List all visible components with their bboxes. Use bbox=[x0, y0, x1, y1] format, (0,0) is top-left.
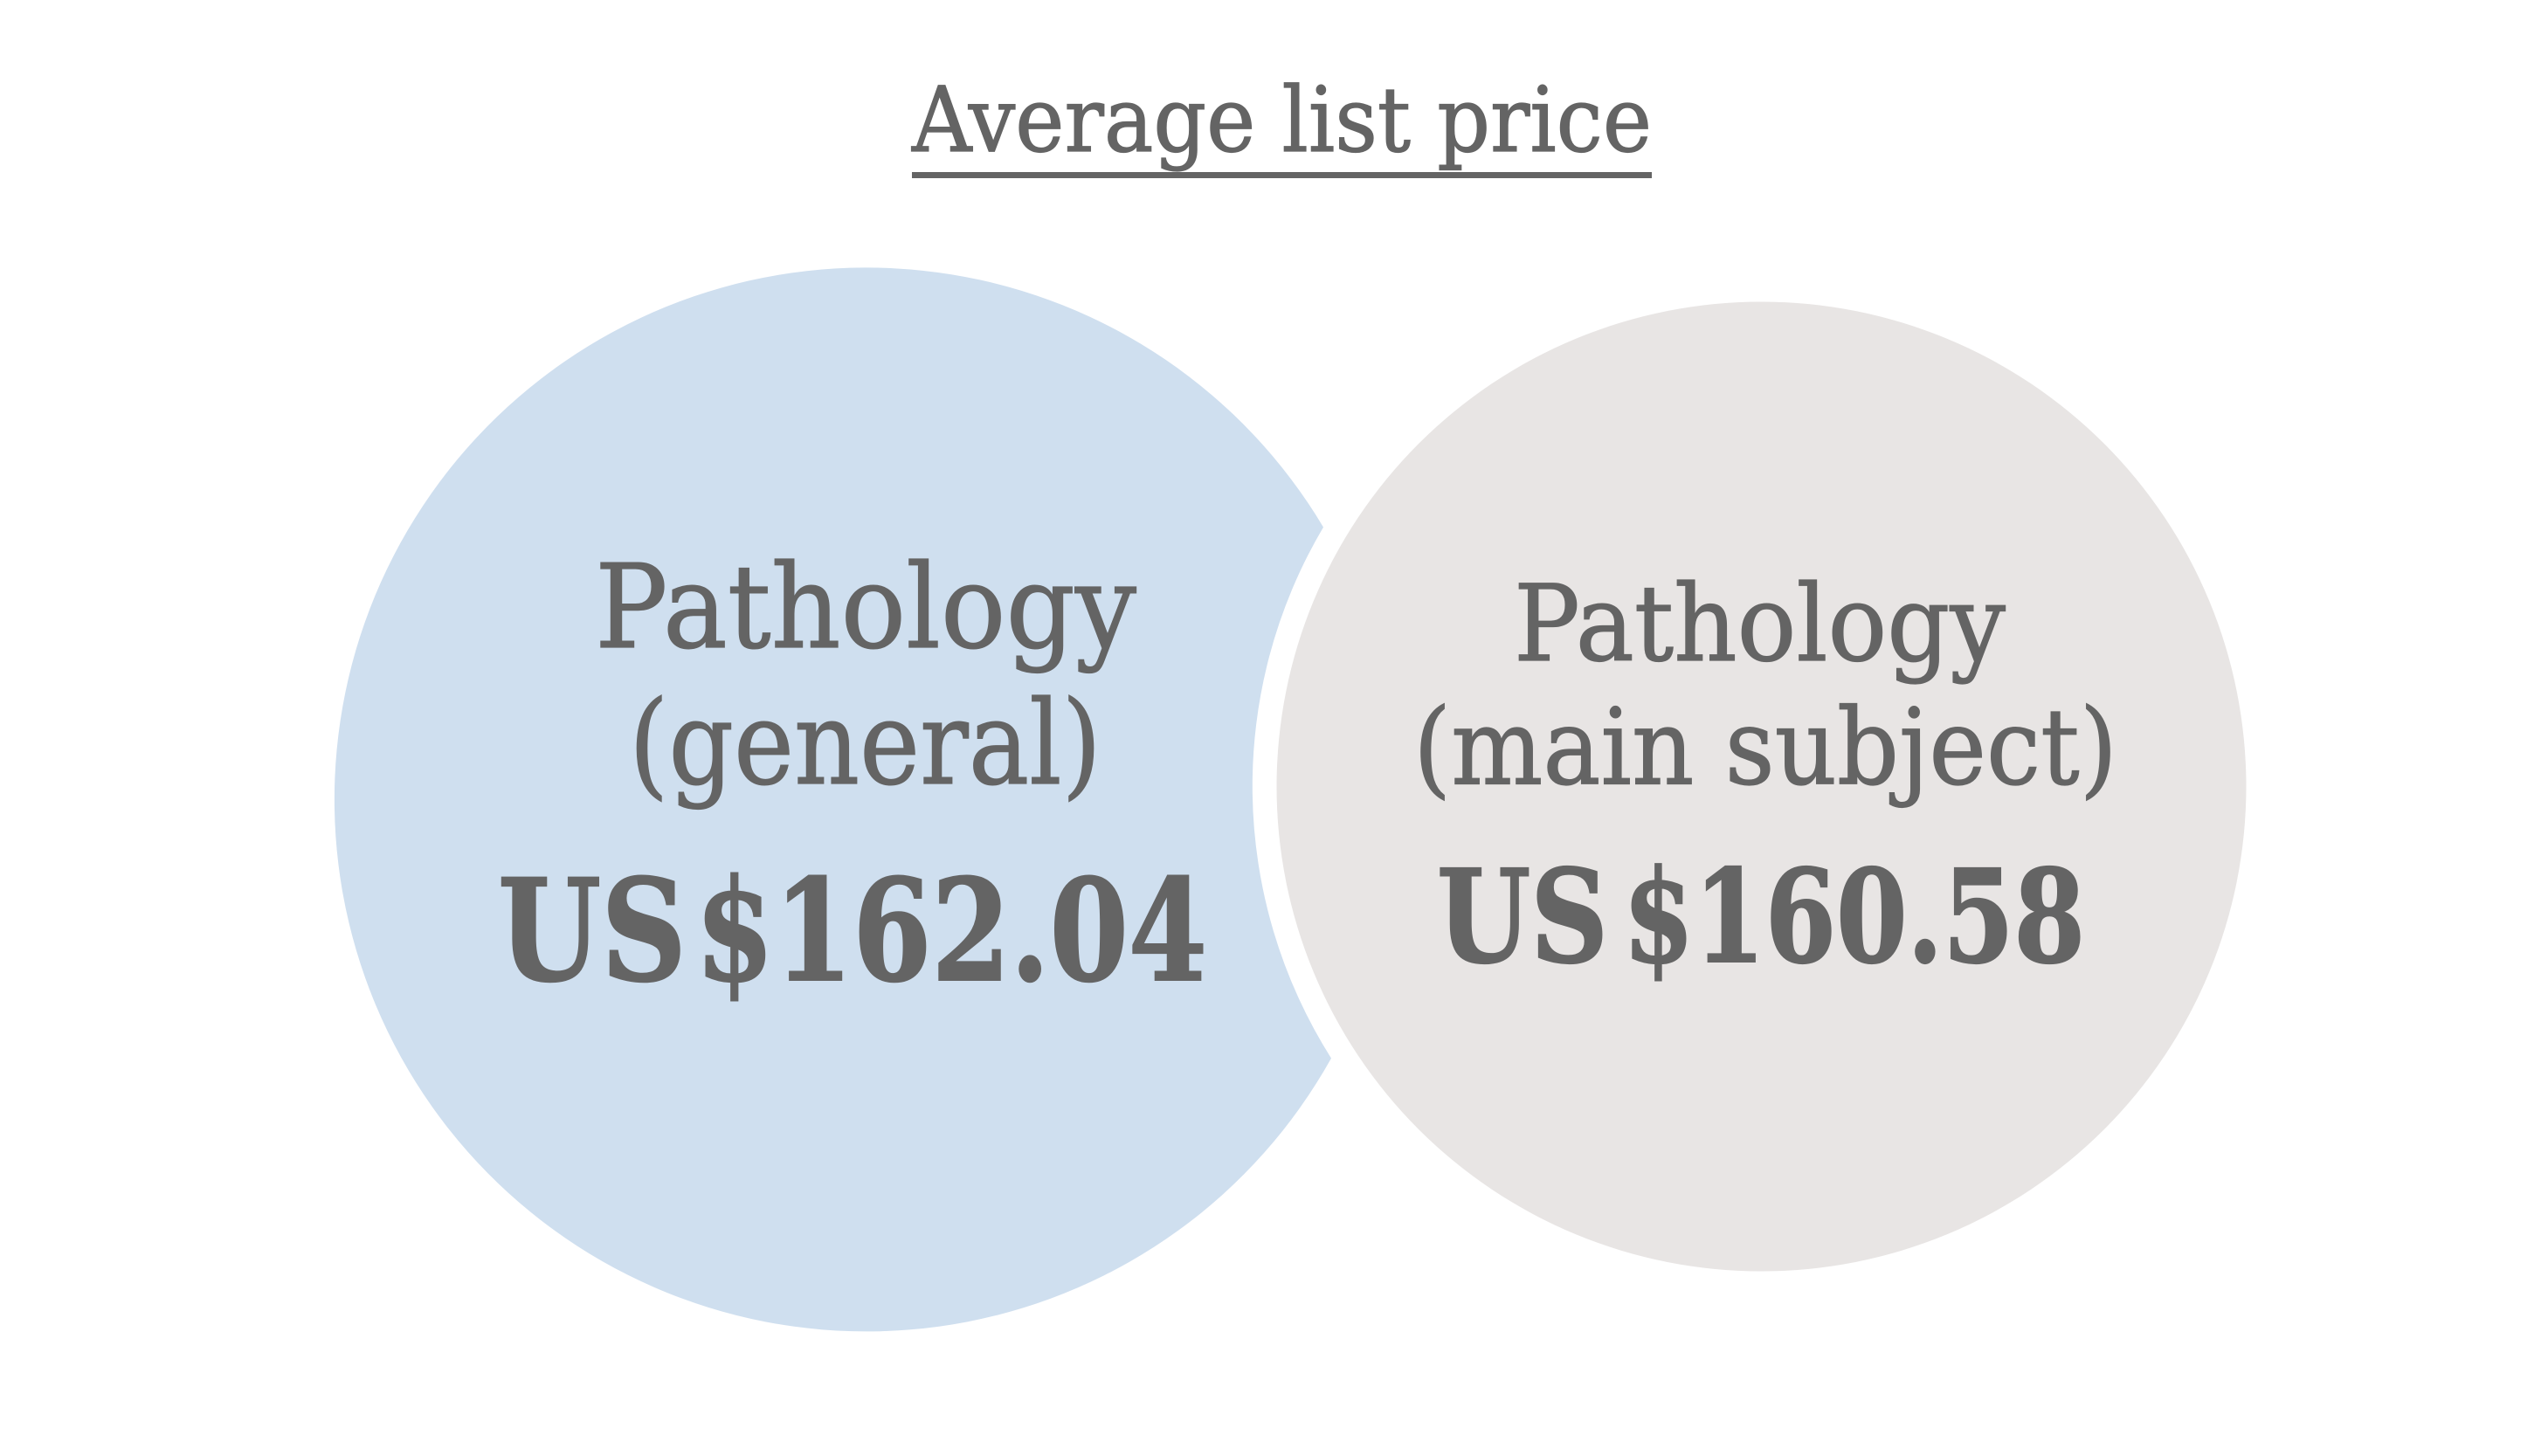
label: pathology main subject bbox=[1413, 562, 2117, 809]
panel: pathology main subject circle bbox=[1277, 302, 2247, 1272]
grey circle bbox=[1277, 302, 2247, 1272]
label: pathology general bbox=[595, 541, 1136, 811]
price: general: $162.04 bbox=[695, 848, 1207, 1013]
label: pathology general: (general) bbox=[629, 677, 1101, 811]
title: Average list price bbox=[911, 68, 1652, 173]
price: general: US bbox=[498, 848, 687, 1013]
blue crescent circle bbox=[335, 267, 1331, 1331]
label: pathology general: Pathology bbox=[595, 541, 1136, 675]
price: general bbox=[498, 848, 1207, 1013]
panel: pathology general circle bbox=[335, 267, 1331, 1331]
price: main subject: $160.58 bbox=[1623, 841, 2085, 992]
price: main subject bbox=[1437, 841, 2085, 992]
label: pathology main subject: (main subject) bbox=[1413, 687, 2117, 809]
label: pathology main subject: Pathology bbox=[1514, 562, 2006, 686]
price: main subject: US bbox=[1437, 841, 1608, 992]
